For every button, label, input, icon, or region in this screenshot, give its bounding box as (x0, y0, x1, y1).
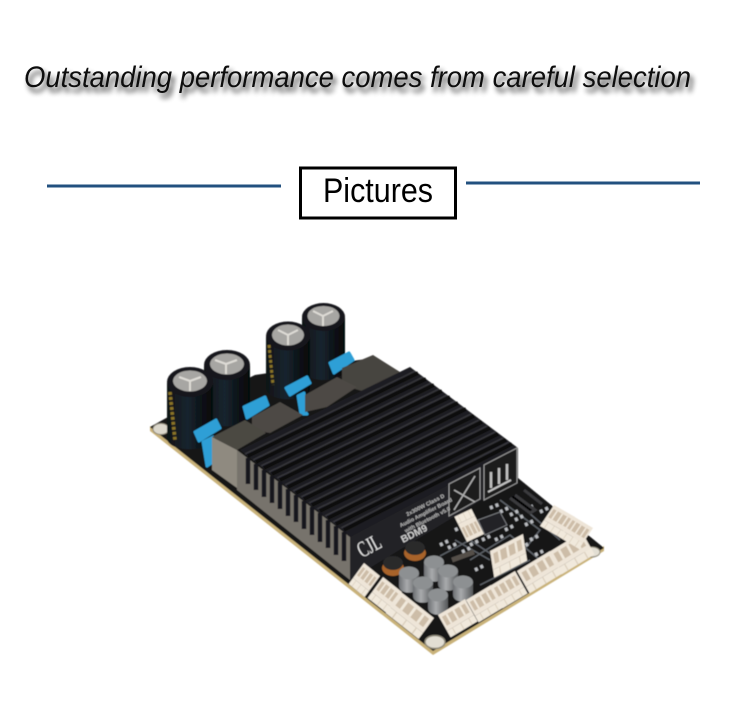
white connectors (349, 505, 595, 639)
blue capacitor 1 (195, 420, 220, 466)
section heading: left rule (47, 184, 281, 188)
inductor block 2 (252, 402, 303, 433)
aluminium capacitors (399, 556, 473, 615)
section heading: Pictures box (300, 168, 456, 218)
heatsink fins (248, 373, 512, 530)
heatsink print: model: BDM9 (399, 523, 430, 546)
blue capacitor 4 (330, 353, 353, 373)
heatsink (237, 367, 518, 580)
blue capacitor 2 (244, 397, 268, 418)
heatsink print: description: 2x300W Class D (406, 493, 446, 518)
heatsink print: description: Audio Amplifier Board (399, 497, 453, 529)
heatsink print: logo: CJL (353, 530, 386, 563)
power inductors (382, 541, 426, 576)
heatsink side teeth (248, 458, 344, 561)
title: Outstanding performance comes from careful selection (24, 61, 691, 94)
electrolytic capacitor: back left (266, 322, 310, 399)
mounting hole: right (584, 547, 600, 557)
IC chip (478, 512, 507, 535)
electrolytic capacitor: back right (302, 303, 345, 380)
inductor block 1 (212, 420, 266, 488)
inductor block 3 (305, 377, 357, 412)
section heading: Pictures box: Pictures (323, 172, 433, 210)
mounting hole: left (153, 424, 169, 434)
heatsink print: description: with Bluetooth v5.0 (403, 506, 452, 535)
heatsink print: description (396, 491, 457, 535)
heatsink label: warning pictogram (449, 468, 480, 516)
board traces and small parts (440, 490, 560, 585)
section heading: right rule (466, 182, 700, 184)
circuit board (150, 358, 604, 655)
heatsink label: heat pictogram (484, 448, 517, 500)
mounting hole: bottom (425, 636, 445, 648)
inductor block 4 (342, 355, 400, 392)
electrolytic capacitor: front right (204, 350, 250, 426)
electrolytic capacitor: front left (167, 367, 213, 449)
product photo: amplifier board (150, 303, 604, 655)
blue capacitor 3 (286, 377, 310, 414)
